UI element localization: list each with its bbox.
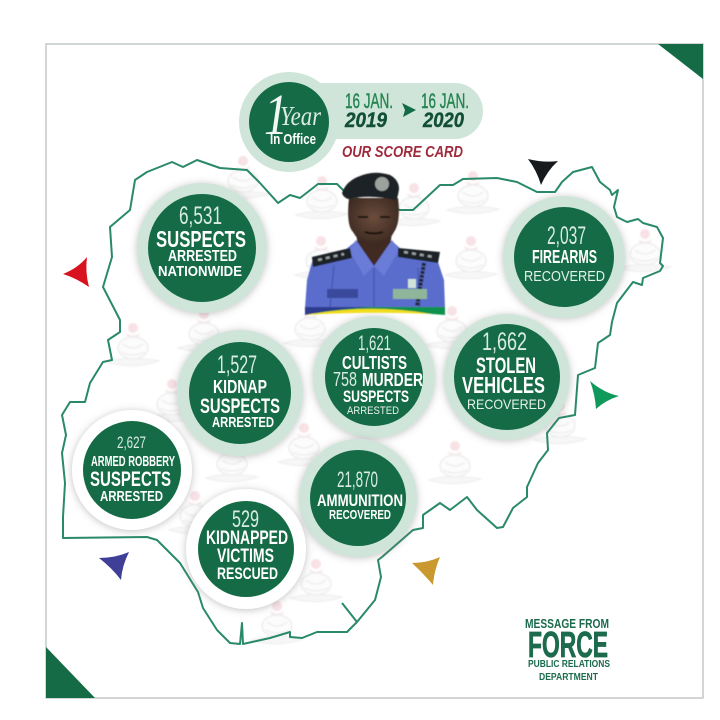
number: 2,627 — [117, 433, 146, 452]
corner triangle: bottom left — [46, 647, 95, 698]
uniform shirt — [305, 241, 445, 308]
header: 1 year in office badge — [239, 72, 483, 172]
stat: 1,621 cultists and 758 murder suspects — [313, 316, 435, 438]
badge outer ring — [239, 72, 339, 172]
face — [348, 198, 399, 246]
base blue swoosh — [305, 307, 370, 315]
header pill — [289, 83, 483, 139]
watermark crests — [107, 156, 671, 644]
label: RECOVERED — [524, 268, 605, 285]
base yellow swoosh — [305, 309, 432, 315]
collar — [349, 240, 399, 276]
epaulette insignia — [318, 252, 434, 260]
end year: 2020 — [422, 109, 464, 132]
stat: 529 kidnapped victims — [186, 489, 306, 609]
numeral 1: 1 — [264, 82, 288, 147]
arrow — [402, 103, 416, 117]
label: RESCUED — [217, 564, 278, 583]
label: FIREARMS — [532, 247, 597, 267]
shirt shading — [330, 265, 420, 308]
number: 21,870 — [337, 467, 378, 492]
label: NATIONWIDE — [158, 263, 242, 280]
label: KIDNAPPED — [206, 528, 288, 549]
icon: green arrowhead — [590, 381, 619, 409]
label: SUSPECTS — [90, 468, 171, 491]
neck — [356, 232, 392, 266]
right epaulette — [398, 248, 440, 263]
label: AMMUNITION — [317, 491, 403, 510]
map outline of Nigeria — [62, 160, 663, 644]
word In Office: In Office — [270, 131, 316, 148]
icon: black arrowhead — [528, 159, 558, 185]
number: 1,621 — [358, 332, 391, 355]
lanyard — [417, 263, 424, 306]
footer: message from Force Public Relations Department — [525, 616, 610, 683]
medal ribbons — [393, 289, 427, 299]
icon: red arrowhead — [63, 257, 89, 287]
icon: gold arrowhead — [412, 557, 440, 585]
label: SUSPECTS — [156, 226, 246, 252]
number: 529 — [232, 506, 259, 533]
start year: 2019 — [344, 109, 387, 132]
force wordmark: FORCE — [528, 624, 608, 665]
department: DEPARTMENT — [539, 671, 598, 683]
word Year: Year — [280, 101, 321, 131]
badge inner circle — [249, 82, 329, 162]
label: KIDNAP — [213, 377, 267, 397]
number: 2,037 — [547, 222, 586, 250]
name tag — [327, 289, 358, 298]
label: SUSPECTS — [200, 395, 280, 418]
eyes and mouth — [358, 217, 390, 234]
label: ARMED ROBBERY — [91, 453, 175, 470]
end date: 16 JAN. — [421, 90, 469, 113]
label: RECOVERED — [329, 507, 391, 522]
number: 1,662 — [482, 328, 527, 356]
base band — [305, 307, 445, 315]
label: ARRESTED — [168, 248, 237, 265]
stat: 2,037 firearms — [503, 196, 625, 318]
left epaulette — [312, 248, 352, 267]
start date: 16 JAN. — [345, 90, 393, 113]
label: ARRESTED — [212, 414, 274, 431]
public relations: PUBLIC RELATIONS — [528, 658, 610, 670]
label: VICTIMS — [217, 546, 274, 567]
number: 6,531 — [179, 202, 222, 230]
stat: 21,870 ammunition — [299, 439, 417, 557]
icon: blue arrowhead — [99, 552, 129, 580]
medal badge — [408, 279, 416, 288]
cap badge — [375, 177, 389, 191]
label: VEHICLES — [462, 372, 545, 398]
portrait: police officer — [305, 173, 445, 315]
stat: 1,527 kidnap suspects — [177, 330, 303, 456]
label: MURDER — [362, 370, 423, 390]
our score card: OUR SCORE CARD — [342, 144, 463, 161]
stat: 6,531 suspects arrested — [137, 183, 267, 313]
cap — [342, 173, 399, 200]
number: 758 — [333, 369, 357, 391]
number: 1,527 — [217, 351, 257, 379]
label: ARRESTED — [347, 405, 399, 417]
label: SUSPECTS — [343, 387, 409, 406]
corner triangle: top right — [658, 44, 703, 79]
label: ARRESTED — [100, 488, 163, 505]
label: CULTISTS — [342, 353, 407, 373]
stat: 1,662 stolen vehicles — [444, 314, 570, 440]
label: STOLEN — [476, 353, 536, 378]
label: RECOVERED — [467, 396, 546, 412]
message from: MESSAGE FROM — [525, 616, 609, 631]
stat: 2,627 armed robbery suspects — [72, 410, 192, 530]
